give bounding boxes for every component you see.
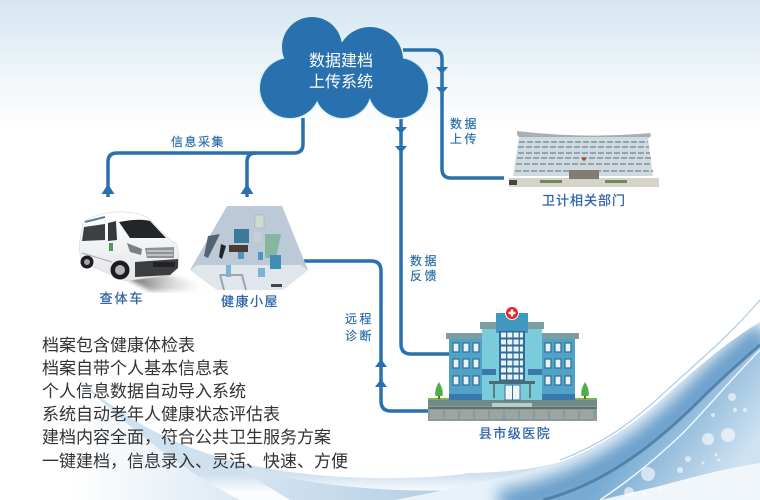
cloud: data archiving upload system <box>260 17 428 118</box>
label: health hut: 健康小屋 <box>221 294 279 309</box>
label: data upload: 上传 <box>450 131 479 146</box>
illustration: health department building <box>509 131 659 187</box>
label: information collection: 信息采集 <box>171 134 225 149</box>
feature list: 档案包含健康体检表 <box>42 336 195 355</box>
hospital plinth <box>428 398 597 421</box>
label: health department: 卫计相关部门 <box>542 193 626 208</box>
label: remote diagnosis <box>345 311 374 343</box>
hospital centre block <box>480 313 544 400</box>
illustration: health hut <box>190 206 308 290</box>
illustration: medical examination van <box>79 212 203 291</box>
label: examination van: 查体车 <box>99 291 145 306</box>
feature list: 档案自带个人基本信息表 <box>42 359 229 378</box>
connector: cloud to health department <box>403 50 504 178</box>
label: data feedback <box>410 253 439 283</box>
label: remote diagnosis: 诊断 <box>345 328 374 343</box>
label: data feedback: 数据 <box>410 253 439 268</box>
cloud: data archiving upload system: 数据建档 <box>309 52 373 70</box>
feature list: 系统自动老年人健康状态评估表 <box>42 405 280 424</box>
label: county hospital: 县市级医院 <box>479 426 551 441</box>
hospital trees <box>435 382 589 399</box>
label: data upload: 数据 <box>450 116 479 131</box>
illustration: county hospital <box>428 306 597 421</box>
connector: cloud to county hospital <box>395 118 450 354</box>
feature list <box>42 336 348 471</box>
hospital wings <box>446 333 579 400</box>
feature list: 个人信息数据自动导入系统 <box>42 382 246 401</box>
label: remote diagnosis: 远程 <box>345 311 374 326</box>
feature list: 建档内容全面，符合公共卫生服务方案 <box>42 428 331 447</box>
feature list: 一键建档，信息录入、灵活、快速、方便 <box>42 452 348 471</box>
label: data upload <box>450 116 479 146</box>
cloud: data archiving upload system: 上传系统 <box>309 73 373 91</box>
connector: cloud to vehicle and health hut <box>102 118 303 197</box>
connector: hospital to health hut <box>304 261 430 411</box>
label: data feedback: 反馈 <box>410 269 439 283</box>
hospital red cross sign <box>506 306 518 320</box>
